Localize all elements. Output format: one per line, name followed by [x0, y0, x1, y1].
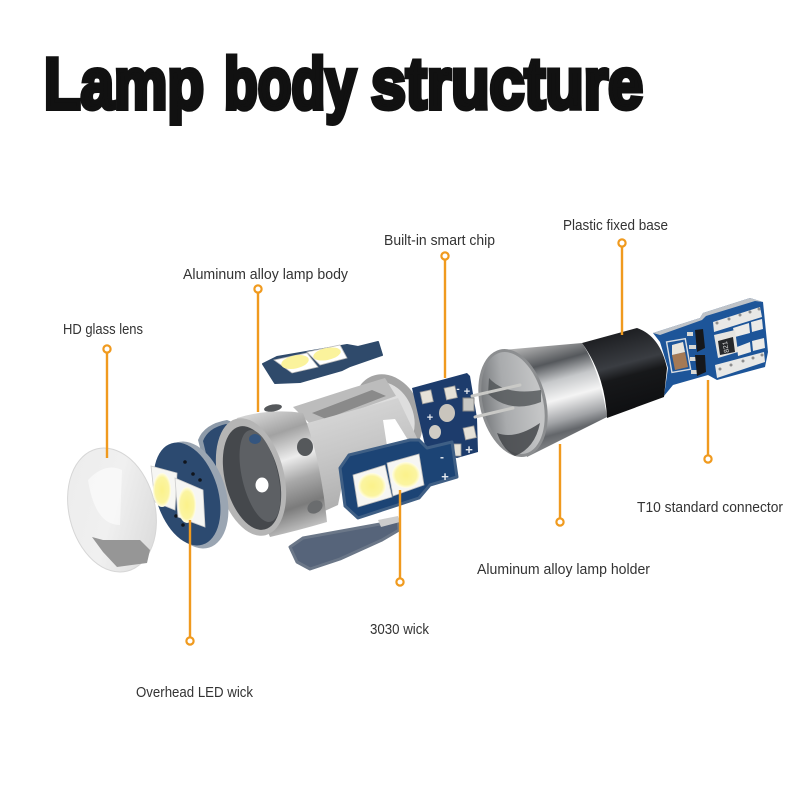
- board outline: [653, 298, 768, 396]
- inner blue glimpse: [249, 434, 261, 444]
- top pad strip: [713, 307, 762, 332]
- overhead LED 1 glow: [153, 473, 171, 507]
- part: aluminum alloy lamp body: [198, 369, 429, 543]
- 3030 LED 1 glow: [358, 473, 386, 499]
- callout: aluminum alloy lamp holder: [477, 444, 650, 578]
- top LED 2 glow: [312, 345, 342, 363]
- cone mouth rim: [468, 342, 558, 464]
- disc face: [142, 434, 232, 554]
- board plus mark: +: [441, 469, 449, 484]
- part: overhead LED disc: [142, 433, 241, 557]
- overhead LED 2: [175, 478, 205, 527]
- cone mouth inner: [471, 345, 555, 461]
- resistor frame: [714, 330, 738, 358]
- part: plastic fixed base: [582, 328, 667, 418]
- 3030 LED 2: [387, 454, 424, 496]
- part: smart chip board: [412, 373, 478, 458]
- callout: T10 standard connector: T10 standard connector: [637, 500, 783, 516]
- plus and minus marks: +: [465, 442, 473, 457]
- resistor code: 821: [722, 340, 731, 353]
- part: 3030 LED board: [340, 440, 457, 518]
- callout: aluminum alloy lamp body: Aluminum alloy lamp body: [183, 267, 349, 283]
- body hole 1: [297, 438, 313, 456]
- dark mouth band: [488, 378, 541, 406]
- callout: HD glass lens: HD glass lens: [63, 322, 143, 338]
- inner hole: [256, 478, 268, 492]
- ring band: [237, 411, 327, 537]
- callout: built-in smart chip: [384, 233, 495, 378]
- board top edge: [653, 298, 763, 335]
- rear ring: [347, 369, 429, 463]
- callout: HD glass lens: [63, 322, 143, 458]
- callout: aluminum alloy lamp holder: Aluminum alloy lamp holder: [477, 562, 650, 578]
- body hole 2: [305, 498, 325, 516]
- inner wall: [232, 426, 288, 526]
- overhead LED 2 glow: [178, 487, 196, 523]
- top LED 2: [307, 345, 347, 365]
- bottom pad strip: [715, 352, 765, 378]
- overhead LED 1: [151, 466, 177, 510]
- title: [44, 44, 643, 124]
- bottom pad dots: [718, 354, 764, 370]
- connector pins: [472, 385, 520, 417]
- callout: aluminum alloy lamp body: [183, 267, 349, 412]
- ic 1: [695, 329, 705, 352]
- chip pads: [420, 386, 476, 456]
- pin block: [463, 398, 474, 411]
- ic side pads: [687, 332, 698, 374]
- resistor: [718, 337, 735, 355]
- plus and minus marks: +: [464, 386, 470, 398]
- middle pads: [733, 319, 765, 356]
- top pad dots: [716, 308, 760, 324]
- upper rail: [293, 378, 396, 426]
- lens highlight: [88, 468, 122, 525]
- small chip left: [667, 339, 691, 372]
- bottom board pins: [378, 516, 400, 527]
- lens dark reflection: [92, 537, 150, 567]
- part: top LED board: [263, 342, 382, 383]
- rail window: [312, 390, 386, 419]
- capacitor: [672, 352, 688, 370]
- title: body: [224, 44, 356, 124]
- part: aluminum alloy lamp holder: [468, 342, 607, 464]
- plus and minus marks: [427, 384, 473, 457]
- top LED 1: [274, 353, 318, 373]
- part: HD glass lens: [55, 438, 169, 582]
- callout: overhead LED wick: Overhead LED wick: [136, 685, 254, 701]
- back disc: [198, 420, 240, 486]
- plus and minus marks: +: [427, 412, 433, 424]
- 3030 LED 2 glow: [392, 462, 420, 488]
- title: structure: [371, 44, 643, 124]
- top hole: [264, 403, 282, 413]
- plate cutout: [383, 419, 408, 446]
- ic 2: [695, 355, 706, 376]
- callout: 3030 wick: [370, 490, 430, 638]
- title: Lamp: [44, 44, 204, 124]
- 3030 LED 1: [353, 465, 392, 507]
- callout: built-in smart chip: Built-in smart chip: [384, 233, 495, 249]
- front ring inner: [213, 420, 291, 536]
- solder blob 2: [429, 425, 441, 439]
- callout: 3030 wick: 3030 wick: [370, 622, 430, 638]
- part: bottom board: [290, 516, 400, 569]
- capacitor cap: [672, 342, 685, 355]
- main plate: [304, 398, 418, 514]
- top LED 1 glow: [280, 353, 310, 371]
- callout: plastic fixed base: [563, 218, 668, 335]
- part: T10 connector board: [653, 298, 768, 396]
- callout: plastic fixed base: Plastic fixed base: [563, 218, 668, 234]
- callout: T10 standard connector: [637, 380, 783, 516]
- dark mouth band lower: [497, 423, 540, 456]
- plus and minus marks: -: [456, 384, 460, 395]
- solder blob: [439, 404, 455, 422]
- cone: [503, 343, 607, 457]
- board minus mark: -: [440, 450, 444, 464]
- disc holes: [174, 460, 202, 527]
- callout: overhead LED wick: [136, 520, 254, 701]
- front ring outer: [204, 411, 298, 543]
